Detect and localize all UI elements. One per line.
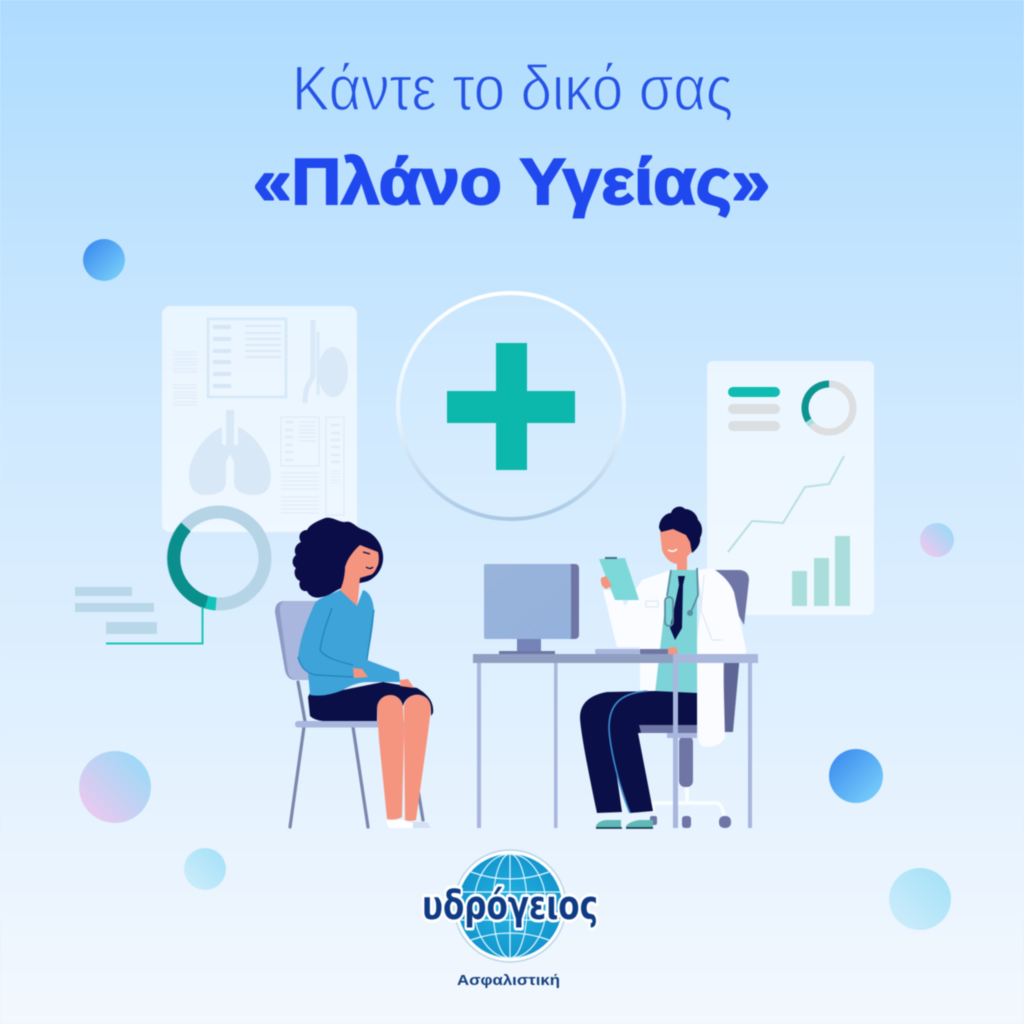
line chart [728, 456, 844, 552]
shoes [387, 820, 415, 828]
small report tables [281, 417, 344, 515]
globe [454, 850, 566, 962]
face and neck [339, 545, 379, 606]
report table [208, 319, 286, 397]
bare legs [377, 695, 431, 821]
icon: lungs [189, 410, 271, 495]
clipboard [599, 558, 639, 600]
chair casters [650, 816, 731, 828]
callout line [106, 607, 202, 644]
hair [293, 518, 383, 598]
sweater folds [298, 608, 374, 677]
patient chair [275, 601, 423, 827]
facial features [363, 552, 373, 568]
decorative circle: lower right pale [889, 868, 951, 930]
doctor chair [650, 570, 749, 828]
wordmark: υδρόγειος [422, 883, 598, 929]
decorative circle: lower left pink [79, 751, 151, 823]
trouser highlight [609, 691, 647, 813]
hand [601, 576, 612, 589]
shoes [596, 820, 653, 828]
clasped hand [353, 668, 368, 678]
shirt [655, 570, 697, 693]
callout bars [75, 587, 157, 634]
desk top right [673, 654, 758, 663]
stethoscope [665, 568, 698, 626]
desk with computer [473, 564, 758, 828]
decorative circle: lower right blue [829, 749, 883, 803]
panel: medical report [162, 306, 357, 532]
chair seat [639, 725, 697, 733]
monitor [484, 564, 579, 655]
coat left side and arm [603, 570, 670, 692]
coat right side [697, 568, 746, 747]
clipboard clip [605, 557, 617, 559]
title [253, 54, 770, 218]
woman patient [293, 518, 433, 828]
title line 2: «Πλάνο Υγείας» [253, 145, 770, 218]
chair base [653, 787, 724, 816]
chair lower back [723, 654, 740, 732]
desk legs [477, 663, 752, 828]
report text lines [173, 352, 197, 405]
papers on desk [595, 647, 678, 654]
desk top [473, 654, 673, 663]
icon: kidney [305, 320, 348, 403]
chair column [679, 736, 693, 787]
donut chart: large with callout [75, 512, 265, 644]
neck and face [660, 527, 693, 577]
chair back [713, 570, 749, 625]
decorative circle: top left blue [83, 239, 125, 281]
coat details [646, 575, 723, 640]
male doctor [580, 507, 746, 828]
seat cushion [667, 733, 697, 738]
skirt [308, 682, 433, 721]
title line 1: Κάντε το δικό σας [292, 54, 733, 124]
smile [668, 549, 677, 551]
tagline: Ασφαλιστική [457, 973, 560, 989]
logo: Υδρόγειος Ασφαλιστική [422, 850, 598, 989]
hand on knee [400, 679, 414, 688]
trousers [580, 691, 697, 813]
donut chart: small [805, 384, 853, 432]
decorative circle: right pink [920, 523, 954, 557]
hair [659, 507, 702, 553]
legend pills [728, 387, 780, 431]
medical plus badge [398, 293, 624, 519]
panel: chart card [707, 361, 874, 615]
sweater [298, 590, 400, 696]
bar chart [792, 536, 850, 606]
icon: plus [447, 343, 575, 470]
tie [670, 576, 685, 640]
shoe soles [596, 827, 653, 829]
decorative circle: lower left pale [184, 848, 226, 890]
